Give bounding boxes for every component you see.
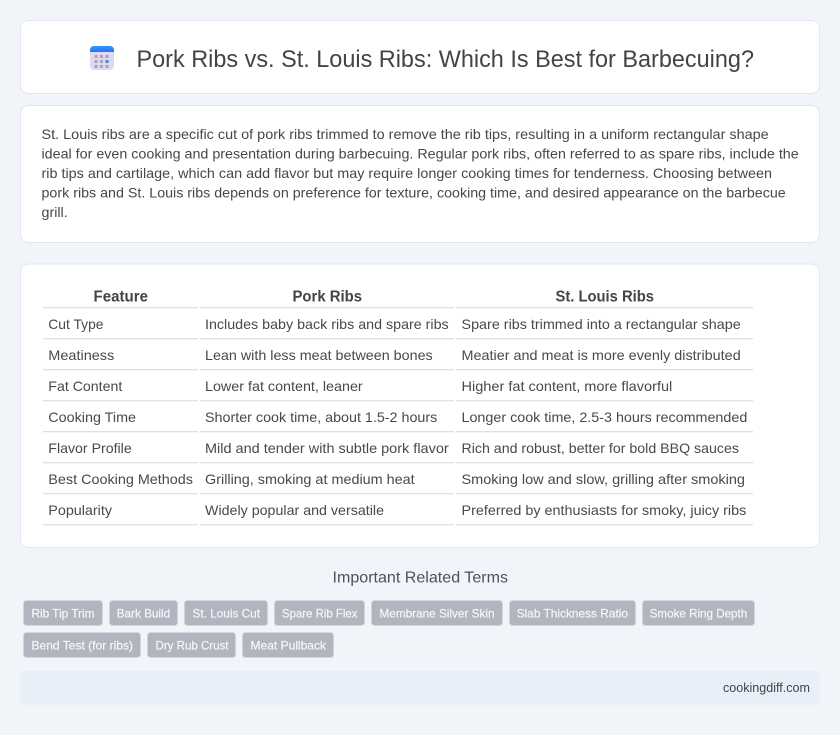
tag: smoke ring depth	[642, 600, 754, 626]
table header: Pork Ribs	[292, 288, 362, 306]
icon: calendar	[90, 46, 114, 70]
table row: cooking time: Shorter cook time, about 1.5-2 hours	[205, 409, 437, 425]
table row: meatiness: Meatiness	[48, 347, 114, 363]
table header: Feature	[94, 288, 148, 306]
tag: rib tip trim	[24, 600, 102, 626]
tag: membrane silver skin	[372, 600, 502, 626]
tag: meat pullback	[242, 632, 334, 658]
table row: cooking time	[43, 409, 753, 432]
table row: meatiness	[43, 347, 753, 370]
tag: rib tip trim: Rib Tip Trim	[32, 606, 94, 620]
table row: flavor profile: Flavor Profile	[48, 440, 132, 456]
panel: comparison table	[20, 264, 820, 548]
tag: dry rub crust	[148, 632, 236, 658]
table row: cooking time: Longer cook time, 2.5-3 hours recommended	[462, 409, 747, 425]
footer	[20, 671, 820, 705]
panel: introduction text: ideal for even cooking and presentation during barbecuing. Regular pork ribs, often referred to as spare ribs, include the	[42, 146, 799, 162]
table row: fat content: Higher fat content, more flavorful	[462, 378, 672, 394]
table row: fat content: Fat Content	[48, 378, 122, 394]
panel: introduction text: pork ribs and St. Louis ribs depends on preference for texture, cooking time, and desired appearance on the barbecue	[42, 184, 786, 200]
table row: cut type: Cut Type	[48, 316, 104, 332]
table row: cut type: Spare ribs trimmed into a rectangular shape	[462, 316, 741, 332]
tag: dry rub crust: Dry Rub Crust	[156, 638, 229, 652]
footer: cookingdiff.com	[723, 680, 810, 695]
tag: bark build	[110, 600, 178, 626]
table header	[43, 288, 753, 308]
panel: introduction text: rib tips and cartilage, which can add flavor but may require longer cooking times for tenderness. Choosing between	[42, 165, 772, 181]
tag: bend test	[24, 632, 140, 658]
tag: st. louis cut	[184, 600, 268, 626]
table row: fat content	[43, 378, 753, 401]
tag: membrane silver skin: Membrane Silver Skin	[380, 606, 494, 620]
panel: introduction text: St. Louis ribs are a specific cut of pork ribs trimmed to remove the rib tips, resulting in a uniform rectangular shape	[42, 126, 769, 142]
table row: meatiness: Lean with less meat between bones	[205, 347, 433, 363]
tag: spare rib flex: Spare Rib Flex	[282, 606, 358, 620]
table row: fat content: Lower fat content, leaner	[205, 378, 363, 394]
tag: slab thickness ratio	[510, 600, 636, 626]
panel: introduction text: grill.	[42, 204, 68, 220]
tag: meat pullback: Meat Pullback	[250, 638, 327, 652]
title: Pork Ribs vs. St. Louis Ribs: Which Is Best for Barbecuing?	[136, 46, 754, 73]
table row: best cooking methods: Smoking low and slow, grilling after smoking	[462, 471, 745, 487]
table row: cut type: Includes baby back ribs and spare ribs	[205, 316, 449, 332]
table row: cut type	[43, 316, 753, 339]
table row: flavor profile: Mild and tender with subtle pork flavor	[205, 440, 449, 456]
table row: best cooking methods	[43, 471, 753, 494]
tag: smoke ring depth: Smoke Ring Depth	[650, 606, 747, 620]
panel: title header	[20, 20, 820, 94]
table row: cooking time: Cooking Time	[48, 409, 136, 425]
table row: popularity: Popularity	[48, 502, 112, 518]
table header: St. Louis Ribs	[556, 288, 654, 306]
tag: bark build: Bark Build	[117, 606, 170, 620]
tag: bend test: Bend Test (for ribs)	[32, 638, 133, 652]
table row: meatiness: Meatier and meat is more evenly distributed	[462, 347, 741, 363]
panel: introduction text	[20, 106, 820, 242]
tag: spare rib flex	[274, 600, 364, 626]
tag: st. louis cut: St. Louis Cut	[192, 606, 261, 620]
heading: important related terms: Important Related Terms	[332, 570, 508, 587]
table row: popularity: Preferred by enthusiasts for smoky, juicy ribs	[462, 502, 746, 518]
table row: popularity	[43, 502, 753, 525]
tag: slab thickness ratio: Slab Thickness Ratio	[517, 606, 628, 620]
tag list: related terms	[24, 600, 754, 658]
table row: best cooking methods: Grilling, smoking at medium heat	[205, 471, 415, 487]
table row: flavor profile: Rich and robust, better for bold BBQ sauces	[462, 440, 739, 456]
table row: best cooking methods: Best Cooking Methods	[48, 471, 193, 487]
table row: flavor profile	[43, 440, 753, 463]
table row: popularity: Widely popular and versatile	[205, 502, 384, 518]
